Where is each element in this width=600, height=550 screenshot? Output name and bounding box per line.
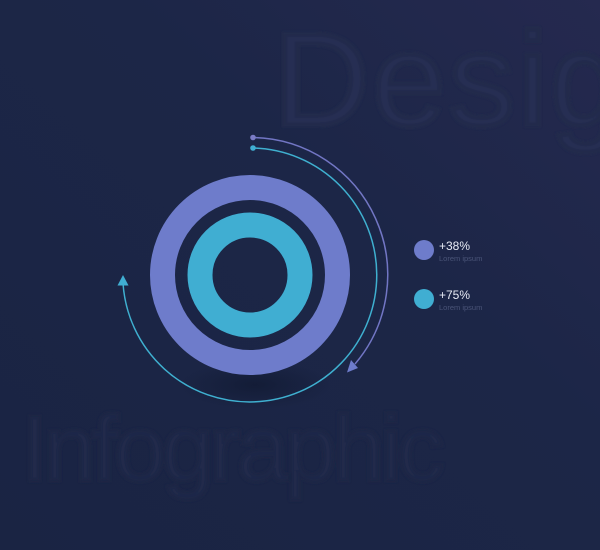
value: +38%	[439, 239, 470, 253]
inner ring: 75%	[200, 225, 300, 325]
outer ring: 38%	[162, 188, 338, 362]
donut chart	[162, 188, 338, 362]
caption: Lorem ipsum	[439, 303, 482, 312]
purple arc arrow	[250, 135, 388, 372]
cyan arc arrow	[118, 145, 377, 402]
watermark: Infographic: Infographic	[22, 398, 444, 500]
swatch	[414, 240, 434, 260]
ring shadow	[180, 361, 330, 409]
value: +75%	[439, 288, 470, 302]
legend: +75%	[414, 288, 482, 312]
legend: +38%	[414, 239, 482, 263]
swatch	[414, 289, 434, 309]
caption: Lorem ipsum	[439, 254, 482, 263]
